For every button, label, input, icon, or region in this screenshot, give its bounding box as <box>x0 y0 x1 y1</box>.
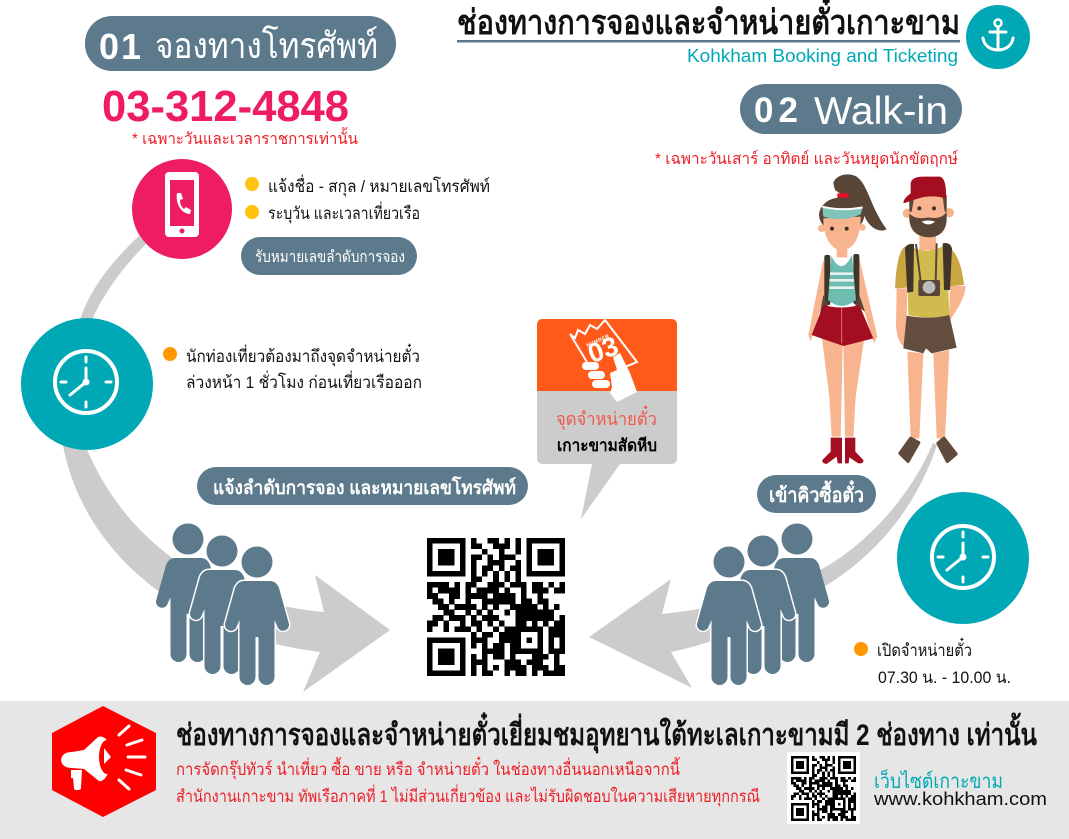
arrow: large curved arrow to QR code from left <box>62 440 390 692</box>
icon: mobile phone <box>132 159 232 259</box>
website label: www.kohkham.com <box>873 789 1047 809</box>
heading pill: 01 phone booking: จองทางโทรศัพท์ <box>155 25 378 66</box>
text block: disclaimer: การจัดกรุ๊ปทัวร์ นำเที่ยว ซื้อ ขาย หรือ จำหน่ายตั๋ว ในช่องทางอื่นนอกเหนือจากนี้ <box>176 756 680 780</box>
list: booking details: ระบุวัน และเวลาเที่ยวเรือ <box>268 201 420 224</box>
pill: queue to buy tickets: เข้าคิวซื้อตั๋ว <box>769 480 864 507</box>
heading pill: 01 phone booking: 01 <box>99 26 141 67</box>
QR code: main <box>427 541 565 673</box>
pill: receive booking number: รับหมายเลขลำดับการจอง <box>255 249 405 266</box>
heading pill: 02 walk-in <box>740 84 962 134</box>
icon: megaphone in hexagon <box>52 706 156 817</box>
phone number: 03-312-4848 <box>102 82 349 131</box>
illustration: woman tourist <box>808 174 887 464</box>
pill: receive booking number <box>241 237 417 275</box>
pill: queue to buy tickets <box>757 475 876 513</box>
heading pill: 02 walk-in: 02 <box>754 91 798 130</box>
icon: anchor <box>966 5 1030 69</box>
text: arrive one hour before: ล่วงหน้า 1 ชั่วโมง ก่อนเที่ยวเรือออก <box>186 370 422 392</box>
icon: hand holding ticket <box>570 320 637 402</box>
illustration: man tourist <box>895 177 966 461</box>
list: booking details <box>245 174 490 224</box>
icon: people queue right <box>697 524 829 685</box>
text: ticket sale hours <box>854 637 1011 687</box>
heading pill: 02 walk-in: Walk-in <box>814 90 948 133</box>
title: ช่องทางการจองและจำหน่ายตั๋วเกาะขาม <box>457 0 960 42</box>
subtitle: Kohkham Booking and Ticketing <box>687 46 958 66</box>
website label <box>873 768 1047 809</box>
text block: disclaimer <box>176 756 760 807</box>
text block: disclaimer: สำนักงานเกาะขาม ทัพเรือภาคที่ 1 ไม่มีส่วนเกี่ยวข้อง และไม่รับผิดชอบในความเสียหายทุกกรณี <box>176 784 760 807</box>
heading pill: 01 phone booking <box>85 16 396 71</box>
text: arrive one hour before <box>163 343 422 392</box>
pill: state booking number <box>197 467 528 505</box>
icon: people queue left <box>156 524 289 685</box>
arrow: large curved arrow to QR code from right <box>589 443 937 688</box>
callout: ticket office: เกาะขามสัดหีบ <box>557 435 657 455</box>
arrow: curved link from phone icon to clock <box>80 236 146 320</box>
note: weekends and holidays: * เฉพาะวันเสาร์ อาทิตย์ และวันหยุดนักขัตฤกษ์ <box>655 149 958 169</box>
QR code: website <box>787 752 860 824</box>
website label: เว็บไซต์เกาะขาม <box>874 768 1003 793</box>
callout: ticket office <box>537 319 677 519</box>
text: arrive one hour before: นักท่องเที่ยวต้องมาถึงจุดจำหน่ายตั๋ว <box>186 343 420 367</box>
panel: bottom notice band <box>0 701 1069 839</box>
text: ticket sale hours: 07.30 น. - 10.00 น. <box>878 668 1011 687</box>
icon: clock right <box>897 492 1029 624</box>
callout: ticket office: จุดจำหน่ายตั๋ว <box>556 405 657 430</box>
list: booking details: แจ้งชื่อ - สกุล / หมายเลขโทรศัพท์ <box>268 174 490 197</box>
pill: state booking number: แจ้งลำดับการจอง และหมายเลขโทรศัพท์ <box>213 476 516 499</box>
note: office hours: * เฉพาะวันและเวลาราชการเท่านั้น <box>132 127 358 148</box>
icon: clock left <box>21 318 153 450</box>
text: ticket sale hours: เปิดจำหน่ายตั๋ว <box>877 637 972 660</box>
icon: hand holding ticket: 03 <box>584 331 622 369</box>
icon: hand holding ticket: NUMBER <box>586 333 610 349</box>
